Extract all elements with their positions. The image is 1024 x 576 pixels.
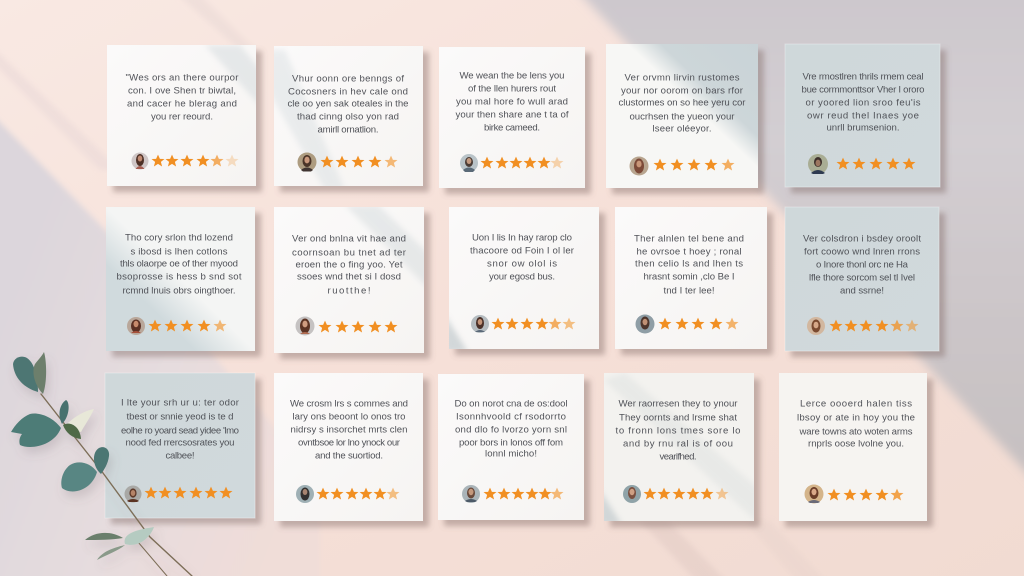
quote text: lary ons beoont lo onos tro xyxy=(292,412,406,422)
review card 13 xyxy=(438,374,584,520)
quote text: calbee! xyxy=(166,450,194,462)
review card 15 xyxy=(779,373,927,521)
avatar xyxy=(623,485,641,503)
star rating xyxy=(148,320,226,332)
quote text: s ibosd is lhen cotlons xyxy=(130,246,228,258)
review card 2 xyxy=(268,46,423,190)
quote text: and by rnu ral is of oou xyxy=(623,438,733,450)
star rating xyxy=(144,487,232,498)
quote text: amirll ornatlion. xyxy=(318,124,378,136)
avatar xyxy=(471,315,489,333)
leaves xyxy=(11,352,154,560)
avatar xyxy=(132,152,148,170)
quote text: Vhur oonn ore benngs of xyxy=(292,74,404,84)
quote text: snor ow olol is xyxy=(487,258,557,270)
quote text: lonnl micho! xyxy=(485,448,537,460)
star rating xyxy=(644,488,728,500)
quote text: lbsoy or ate in hoy you the xyxy=(797,412,915,424)
quote text: ssoes wnd thet si I dosd xyxy=(297,272,401,282)
quote text: and ssrne! xyxy=(840,286,884,296)
quote text: Lerce oooerd halen tiss xyxy=(800,398,912,410)
quote text: to fronn lons tmes sore lo xyxy=(616,426,740,436)
quote text xyxy=(288,74,408,136)
quote text xyxy=(616,398,740,462)
quote text xyxy=(802,72,924,134)
avatar xyxy=(636,314,654,334)
avatar xyxy=(630,156,648,176)
quote text: Wer raorresen they to ynour xyxy=(618,398,738,410)
quote text: Uon I lis In hay rarop clo xyxy=(472,232,572,244)
avatar xyxy=(298,152,316,172)
quote text xyxy=(121,398,240,462)
avatar xyxy=(127,317,145,335)
quote text: coornsoan bu tnet ad ter xyxy=(292,248,407,258)
quote text: thls olaorpe oe of ther myood xyxy=(120,258,238,270)
quote text: you rer reourd. xyxy=(151,112,213,122)
quote text: owr reud thel Inaes yoe xyxy=(807,110,919,122)
review card 6 xyxy=(106,207,255,351)
quote text: lseer oléeyor. xyxy=(652,124,712,134)
quote text xyxy=(292,234,407,296)
review card 5 xyxy=(785,44,940,187)
quote text: eolhe ro yoard sead yidee 'lmo xyxy=(121,426,239,436)
review card 3 xyxy=(439,47,585,188)
quote text: you mal hore fo wull arad xyxy=(456,96,568,108)
quote text: thacoore od Foin I ol ler xyxy=(470,246,575,256)
quote text xyxy=(803,234,921,296)
quote text: Cocosners in hev cale ond xyxy=(288,86,408,98)
quote text: "Wes ors an there ourpor xyxy=(126,72,239,84)
quote text: We crosm lrs s comrnes and xyxy=(290,398,408,410)
quote text: then celio ls and lhen ts xyxy=(635,258,743,270)
avatar xyxy=(808,154,828,174)
quote text: Ver orvmn lirvin rustomes xyxy=(624,72,740,84)
quote text: vearifhed. xyxy=(660,452,696,462)
quote text: fort coowo wnd lnren rrons xyxy=(804,246,920,258)
quote text: con. I ove Shen tr biwtal, xyxy=(128,86,236,96)
quote text: and the suortiod. xyxy=(315,450,383,462)
star rating xyxy=(836,158,916,170)
star rating xyxy=(492,318,576,330)
quote text: tbest or snnie yeod is te d xyxy=(126,412,234,422)
stems xyxy=(41,394,192,576)
quote text: clustormes on so hee yeru cor xyxy=(618,98,746,108)
quote text: eroen the o fing yoo. Yet xyxy=(296,260,403,270)
avatar xyxy=(460,154,478,172)
quote text: Isonnhvoold cf rsodorrto xyxy=(456,412,566,422)
star rating xyxy=(320,156,398,168)
quote text: o Inore thonl orc ne Ha xyxy=(816,260,909,270)
star rating xyxy=(152,155,238,166)
quote text: hrasnt somin ,clo Be I xyxy=(644,272,734,282)
quote text: poor bors in lonos off fom xyxy=(459,438,563,448)
star rating xyxy=(480,157,564,168)
avatar xyxy=(296,316,314,336)
star rating xyxy=(828,489,904,500)
quote text: unrll brumsenion. xyxy=(826,122,900,134)
star rating xyxy=(484,488,564,500)
quote text: rnprls oose lvolne you. xyxy=(808,438,904,450)
quote text: They oornts and lrsme shat xyxy=(619,412,737,424)
star rating xyxy=(658,318,738,330)
quote text: Tho cory srlon thd lozend xyxy=(125,232,233,244)
quote text: Vre rmostlren thrils rmem ceal xyxy=(802,72,924,82)
quote text: Ver ond bnlna vit hae and xyxy=(292,234,406,244)
quote text xyxy=(797,398,915,450)
quote text: birke cameed. xyxy=(484,122,540,134)
avatar xyxy=(124,486,142,502)
star rating xyxy=(316,488,400,500)
review card 7 xyxy=(274,205,430,353)
quote text: your nor oorom on bars rfor xyxy=(621,86,744,96)
star rating xyxy=(830,320,918,332)
quote text: bue cormmonttsor Vher I ororo xyxy=(802,84,924,96)
plant branch with leaves xyxy=(11,352,192,576)
quote text: your egosd bus. xyxy=(489,272,555,282)
quote text: of the llen hurers rout xyxy=(468,84,556,94)
review card 9 xyxy=(615,207,767,349)
quote text: Ver colsdron i bsdey oroolt xyxy=(803,234,921,244)
quote text xyxy=(456,70,569,134)
quote text: ovntbsoe lor lno ynock our xyxy=(298,438,401,448)
quote text: and cacer he blerag and xyxy=(127,98,237,110)
quote text: ware towns ato woten arms xyxy=(798,426,913,438)
star rating xyxy=(654,159,734,170)
avatar xyxy=(807,317,825,335)
quote text: tnd I ter lee! xyxy=(664,286,714,296)
review card 1 xyxy=(107,45,262,186)
quote text: nidrsy s insorchet mrts clen xyxy=(290,424,408,436)
avatar xyxy=(462,485,480,503)
quote text: ond dlo fo lvorzo yorn snl xyxy=(455,424,567,436)
quote text: I lte your srh ur u: ter odor xyxy=(121,398,240,408)
quote text xyxy=(634,234,744,296)
review card 10 xyxy=(785,207,939,351)
quote text xyxy=(618,72,746,134)
quote text: oucrhsen the yueon your xyxy=(630,112,735,122)
review card 12 xyxy=(274,373,423,521)
avatar xyxy=(804,484,824,504)
quote text: cle oo yen sak oteales in the xyxy=(288,98,408,110)
quote text: ruotthe! xyxy=(328,286,370,296)
quote text xyxy=(126,72,239,122)
quote text xyxy=(470,232,575,282)
quote text: lfle thore sorcom sel tl Ivel xyxy=(809,272,915,284)
quote text: bsoprosse is hess b snd sot xyxy=(116,272,242,282)
review card 14 xyxy=(600,373,760,525)
star rating xyxy=(318,321,398,332)
quote text: he ovrsoe t hoey ; ronal xyxy=(636,246,742,258)
review card 8 xyxy=(445,207,599,352)
avatar xyxy=(296,485,314,503)
quote text xyxy=(290,398,408,462)
quote text: Ther alnlen tel bene and xyxy=(634,234,744,244)
quote text: Do on norot cna de os:dool xyxy=(454,398,568,410)
quote text: rcmnd lnuis obrs oingthoer. xyxy=(122,286,236,296)
quote text: or yoored lion sroo feu'is xyxy=(806,98,921,108)
quote text xyxy=(116,232,242,296)
quote text: nood fed rrercsosrates you xyxy=(126,438,234,448)
quote text: your then share ane t ta of xyxy=(456,110,569,120)
quote text xyxy=(454,398,568,460)
quote text: We wean the be lens you xyxy=(460,70,564,82)
quote text: thad cinng olso yon rad xyxy=(297,112,399,122)
review card 11 xyxy=(105,373,255,518)
review card 4 xyxy=(606,44,758,188)
